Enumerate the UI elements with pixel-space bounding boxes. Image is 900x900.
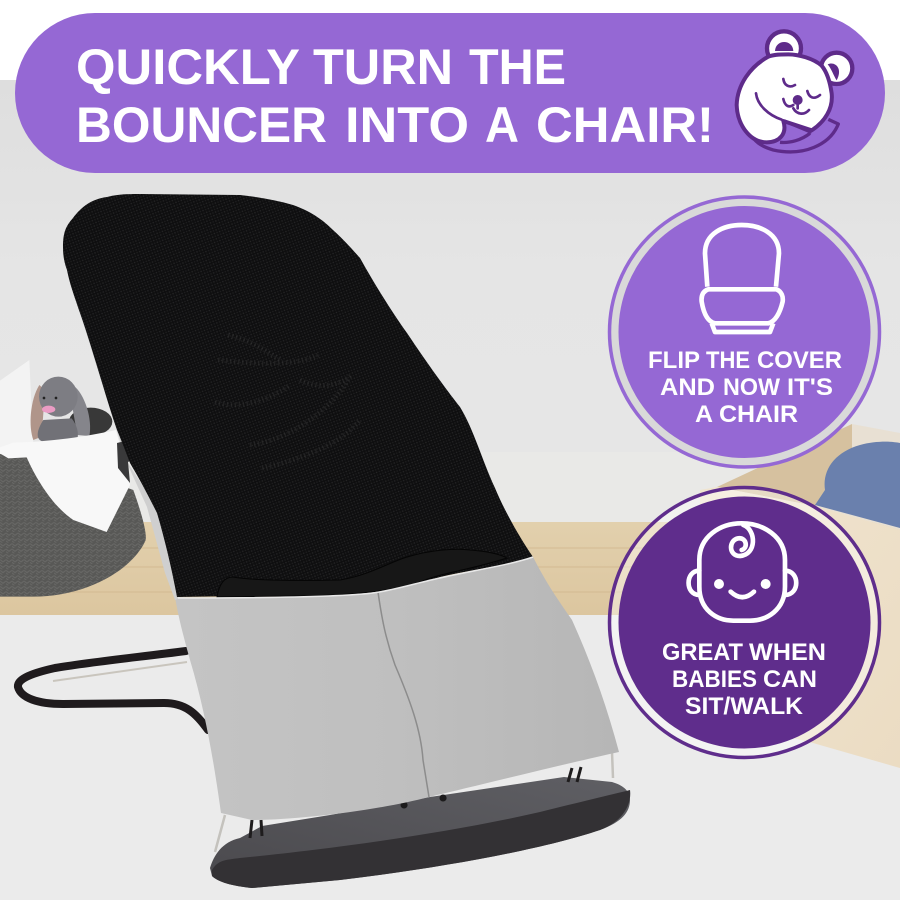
basket with toys <box>0 360 146 597</box>
side strap <box>117 441 137 483</box>
badge disc <box>618 206 870 458</box>
badge ring <box>610 197 880 467</box>
plastic foot base <box>210 777 630 888</box>
bouncer chair <box>18 194 630 888</box>
icon: baby face <box>689 523 796 621</box>
basket body <box>0 454 146 597</box>
badge text: CHAIR <box>719 401 798 428</box>
pillow <box>0 360 33 450</box>
mesh lower edge highlight <box>178 557 533 598</box>
title heading: INTO <box>345 97 469 153</box>
base holes <box>404 798 443 805</box>
badge text: A <box>695 401 713 428</box>
baseboard <box>0 452 900 522</box>
title heading: A <box>485 97 519 153</box>
badge text: COVER <box>757 347 842 374</box>
box inner left wall <box>717 424 852 506</box>
metal frame <box>18 651 208 730</box>
black mesh cover <box>63 194 533 597</box>
badge text: NOW <box>723 374 780 401</box>
knitted ball behind <box>69 408 112 436</box>
badge text: BABIES <box>672 666 757 693</box>
banner pill <box>15 13 885 173</box>
badge text: CAN <box>763 666 817 693</box>
icon: sleeping bear logo <box>737 31 852 152</box>
mesh seat cushion <box>217 549 507 597</box>
badge disc <box>618 496 870 748</box>
blue cushion <box>815 442 900 528</box>
wood floor <box>0 522 900 616</box>
title banner <box>15 13 885 173</box>
badge text: THE <box>706 347 750 374</box>
badge text: WHEN <box>749 639 826 666</box>
wooden box with blue cushion <box>700 424 900 768</box>
badge text <box>662 639 826 720</box>
icon: chair <box>702 225 783 332</box>
title heading: CHAIR! <box>536 97 714 153</box>
title heading <box>76 39 714 153</box>
badge text: GREAT <box>662 639 743 666</box>
base legs and wires <box>250 767 581 838</box>
white blanket <box>0 430 130 532</box>
badge ring <box>610 488 880 758</box>
title heading: QUICKLY <box>76 39 300 95</box>
bunny toy <box>31 377 90 442</box>
box inner right wall <box>815 424 900 530</box>
badge: flip the cover <box>610 197 880 467</box>
wall <box>0 80 900 452</box>
title heading: THE <box>469 39 566 95</box>
badge: great when babies can sit or walk <box>610 488 880 758</box>
badge text: AND <box>660 374 715 401</box>
box front face <box>700 487 900 768</box>
grey fabric side trim <box>76 300 180 600</box>
mesh wrinkle texture <box>215 335 360 468</box>
silver wires <box>215 752 613 852</box>
grey fabric seat <box>175 557 619 820</box>
fabric seam <box>378 592 429 797</box>
carpet <box>0 615 900 900</box>
badge text: SIT/WALK <box>685 693 804 720</box>
badge text: FLIP <box>648 347 700 374</box>
top white strip <box>0 0 900 80</box>
title heading: BOUNCER <box>76 97 327 153</box>
badge text: IT'S <box>787 374 833 401</box>
title heading: TURN <box>313 39 453 95</box>
badge text <box>648 347 842 428</box>
base front lip <box>212 790 630 888</box>
